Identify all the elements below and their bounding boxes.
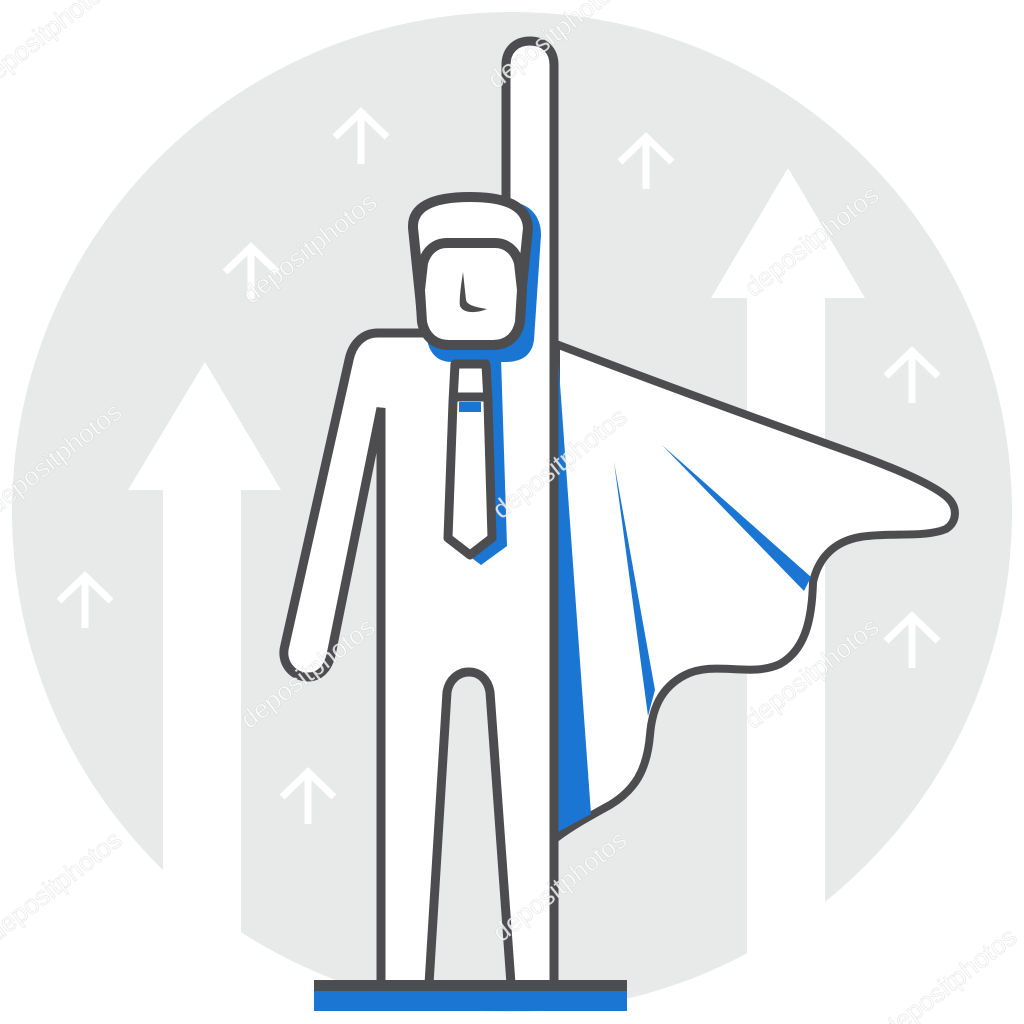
cape fill and outline: [556, 344, 955, 838]
base blue platform: [314, 990, 627, 1011]
hair: [413, 197, 528, 325]
tie fill and outline: [448, 364, 492, 555]
watermark: depositphotos: [738, 179, 884, 303]
nose: [460, 272, 487, 312]
tie shadow: [468, 358, 507, 565]
figure: body: [284, 41, 554, 984]
tie knot shadow: [459, 402, 481, 412]
watermark: depositphotos: [234, 611, 380, 735]
face: [420, 243, 522, 345]
watermark: depositphotos: [738, 611, 884, 735]
base top line: [314, 980, 627, 991]
large arrow: right: [711, 168, 865, 1024]
cape: [556, 344, 955, 838]
watermark: depositphotos: [486, 824, 632, 948]
head: [413, 197, 528, 345]
body fill: [284, 41, 554, 984]
cape fold: outer: [662, 445, 811, 591]
watermark: depositphotos: [486, 401, 632, 525]
tie: [448, 358, 507, 565]
cape fold: inner: [558, 356, 591, 832]
small arrows: [59, 112, 938, 824]
head shadow: [427, 202, 541, 362]
legs outline: [429, 672, 511, 984]
cape fold: middle: [614, 462, 655, 716]
base: [314, 980, 627, 1011]
large arrow: left: [128, 362, 281, 1024]
raised arm and right side outline: [506, 41, 554, 984]
tie knot line: [453, 392, 488, 402]
left arm outline: [284, 333, 425, 984]
watermark: depositphotos: [236, 186, 382, 310]
